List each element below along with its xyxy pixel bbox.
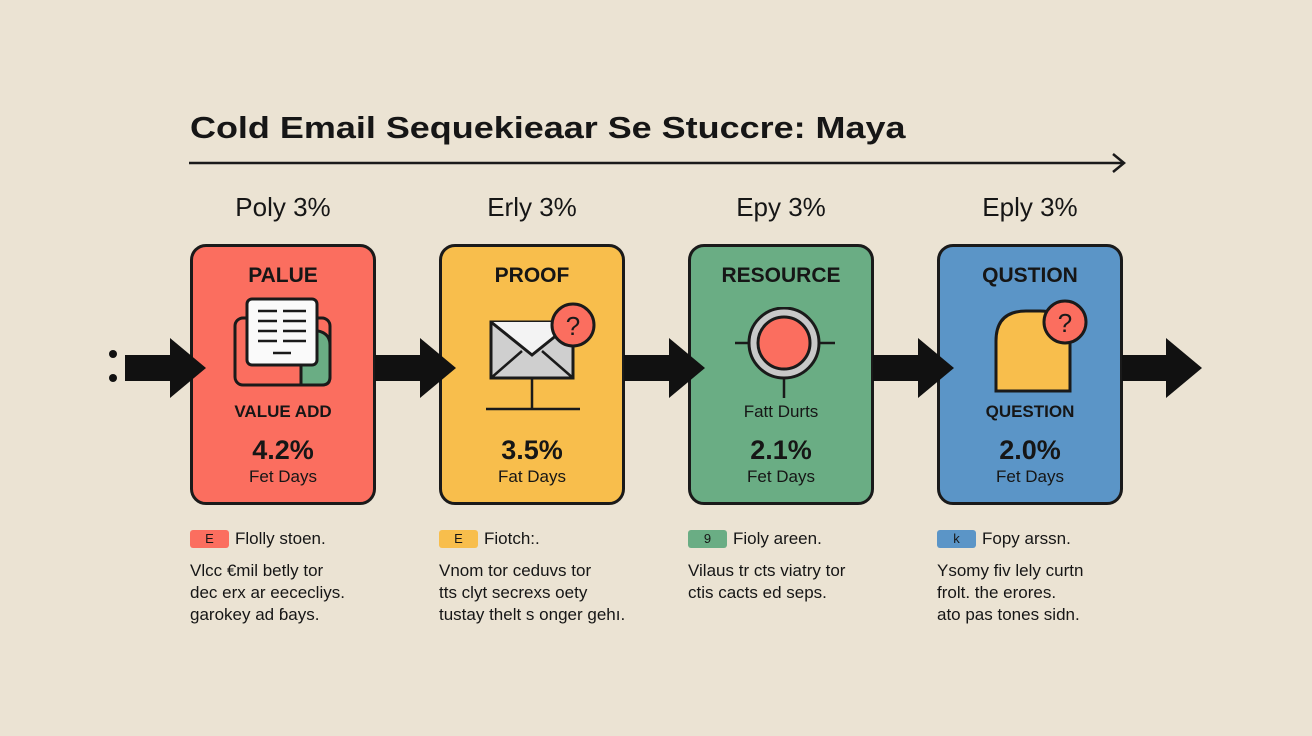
panel: proof: 3.5% (501, 435, 563, 465)
icon: envelope (486, 302, 596, 410)
panel: resource: 2.1% (750, 435, 812, 465)
step headers: Poly 3% (235, 192, 331, 222)
panel: resource: RESOURCE (721, 264, 841, 287)
notes: question: Fopy arssn. (982, 529, 1071, 548)
notes: value: dec erx ar eececliys. (190, 583, 345, 602)
notes: value: Flolly stoen. (235, 529, 326, 548)
notes: resource: 9 (704, 531, 711, 546)
notes: proof: Fiotch:. (484, 529, 540, 548)
panel: value: VALUE ADD (234, 402, 332, 421)
notes: question: frolt. the erores. (937, 583, 1056, 602)
icon: envelope: ? (566, 311, 580, 341)
icon: target (735, 307, 835, 398)
panel: proof: PROOF (495, 264, 569, 287)
panel: proof: Fat Days (498, 467, 566, 486)
panel: value (190, 244, 376, 505)
notes: question: ato pas tones sidn. (937, 605, 1080, 624)
notes: proof: tustay thelt s onger gehı. (439, 605, 625, 624)
notes: question (937, 529, 1083, 624)
icon: question bubble (994, 300, 1088, 392)
notes: proof: Vnom tor ceduvs tor (439, 561, 591, 580)
panel: resource: Fet Days (747, 467, 815, 486)
notes: resource: Vilaus tr cts viatry tor (688, 561, 845, 580)
icon: question bubble: ? (1058, 308, 1072, 338)
title: Cold Email Sequekieaar Se Stuccre: Maya (190, 110, 906, 145)
notes: question: k (953, 531, 960, 546)
notes: question: Ysomy fiv lely curtn (937, 561, 1083, 580)
step headers: Eply 3% (982, 192, 1078, 222)
flow arrows (109, 338, 1202, 398)
notes: value: garokey ad ɓays. (190, 605, 319, 624)
panel: proof (439, 244, 625, 505)
arrow: timeline (189, 153, 1126, 173)
notes: proof (439, 529, 625, 624)
panel: resource: Fatt Durts (744, 402, 818, 421)
panel: value: Fet Days (249, 467, 317, 486)
panel: value: PALUE (248, 264, 318, 287)
notes: proof: E (454, 531, 463, 546)
step headers: Epy 3% (736, 192, 826, 222)
panel: question (937, 244, 1123, 505)
step headers: Erly 3% (487, 192, 577, 222)
panel: resource (688, 244, 874, 505)
icon: document (234, 298, 332, 386)
notes: resource: ctis cacts ed seps. (688, 583, 827, 602)
step headers (235, 192, 1078, 222)
panel: question: QUSTION (982, 264, 1078, 287)
notes: proof: tts clyt secrexs oety (439, 583, 587, 602)
notes: value: E (205, 531, 214, 546)
notes: value (190, 529, 345, 624)
notes: value: Vlcc €mil betly tor (190, 561, 323, 580)
panel: question: Fet Days (996, 467, 1064, 486)
panel: value: 4.2% (252, 435, 314, 465)
panel: question: QUESTION (986, 402, 1074, 421)
notes: resource: Fioly areen. (733, 529, 822, 548)
panel: question: 2.0% (999, 435, 1061, 465)
notes: resource (688, 529, 846, 602)
